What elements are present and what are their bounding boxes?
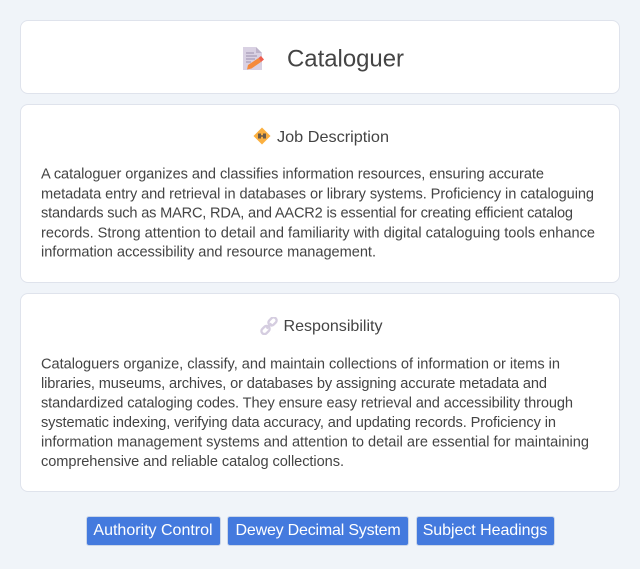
panel: title header xyxy=(20,20,620,94)
icon: document with pencil xyxy=(243,47,264,70)
tag: authority control xyxy=(86,516,220,546)
icon: chain link xyxy=(260,317,278,335)
text block: job description xyxy=(41,166,595,260)
text block: job description: A cataloguer organizes and classifies information resources, ensuring accurate xyxy=(41,166,544,182)
text block: job description: standards such as MARC, RDA, and AACR2 is essential for creating efficient catalog xyxy=(41,206,573,222)
text block: responsibility: comprehensive and reliable catalog collections. xyxy=(41,454,344,470)
text block: responsibility xyxy=(41,356,589,470)
tag: subject headings xyxy=(416,516,554,546)
text block: responsibility: Cataloguers organize, classify, and maintain collections of information or items in xyxy=(41,356,560,372)
heading: responsibility: Responsibility xyxy=(284,318,382,334)
text block: responsibility: standardized cataloging codes. They ensure easy retrieval and accessibility through xyxy=(41,396,573,412)
tag: dewey decimal system: Dewey Decimal System xyxy=(236,522,400,539)
tag: authority control: Authority Control xyxy=(93,522,213,539)
text block: responsibility: information management systems and attention to detail are essential for maintaining xyxy=(41,434,589,450)
tag: dewey decimal system xyxy=(227,516,409,546)
title: Cataloguer xyxy=(287,46,404,72)
icon: orange diamond xyxy=(254,128,270,144)
text block: responsibility: libraries, museums, archives, or databases by assigning accurate metadata and xyxy=(41,376,547,392)
tag: subject headings: Subject Headings xyxy=(423,522,547,539)
text block: job description: information accessibility and resource management. xyxy=(41,244,376,260)
text block: job description: metadata entry and retrieval in databases or library systems. Proficiency in cataloguing xyxy=(41,186,594,202)
panel: job description xyxy=(20,104,620,283)
text block: responsibility: systematic indexing, verifying data accuracy, and updating records. Proficiency in xyxy=(41,415,556,431)
text block: job description: records. Strong attention to detail and familiarity with digital cataloguing tools enhance xyxy=(41,225,595,241)
panel: responsibility xyxy=(20,293,620,492)
heading: job description: Job Description xyxy=(277,128,389,146)
